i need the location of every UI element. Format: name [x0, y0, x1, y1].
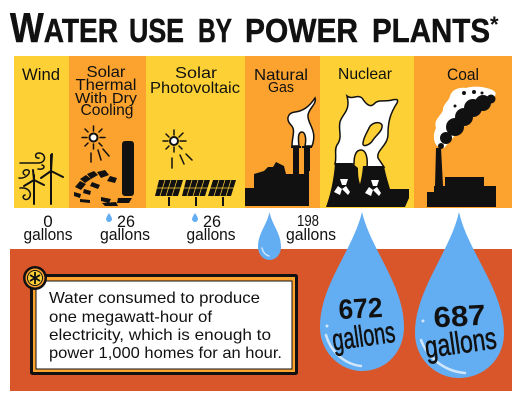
callout: definition — [23, 266, 296, 374]
callout text: electricity, which is enough to — [49, 327, 271, 344]
icon: sun — [82, 126, 109, 162]
label: solar photovoltaic — [150, 65, 240, 97]
values: 26 gallons photovoltaic: gallons — [186, 225, 236, 244]
title: PLANTS — [372, 12, 490, 49]
callout text: Water consumed to produce — [49, 290, 260, 307]
label: solar thermal with dry cooling: Solar — [86, 64, 126, 81]
title — [10, 4, 499, 51]
panel: coal — [414, 56, 512, 208]
label: natural gas — [254, 67, 308, 96]
drop: nuclear 672 gallons: 672 — [338, 292, 383, 325]
icon: solar panels — [155, 180, 236, 206]
icon: gas plant silhouette — [245, 146, 312, 206]
icon: smoke — [434, 87, 496, 149]
values: 0 gallons: gallons — [24, 225, 72, 244]
values: 198 gallons: 198 — [297, 213, 319, 230]
values: 198 gallons — [258, 212, 336, 260]
icon: gas plant steam — [288, 98, 315, 146]
values: 26 gallons thermal: gallons — [100, 225, 150, 244]
title: WATER — [10, 4, 118, 51]
panel: wind — [14, 56, 69, 208]
values: 0 gallons — [24, 212, 72, 244]
label: natural gas: Gas — [268, 79, 294, 96]
icon: steam hole — [363, 123, 382, 146]
values: 26 gallons thermal — [100, 212, 150, 244]
icon: solar tower and mirrors — [74, 141, 134, 206]
label: nuclear: Nuclear — [338, 66, 393, 83]
icon: wind turbines — [19, 153, 63, 204]
label: solar thermal with dry cooling — [75, 64, 138, 119]
drop: nuclear 672 gallons: gallons — [330, 316, 397, 357]
values: 26 gallons photovoltaic — [186, 212, 236, 244]
icon: nuclear steam — [335, 96, 398, 167]
label: solar thermal with dry cooling: Thermal — [76, 77, 136, 94]
icon: asterisk badge — [23, 266, 47, 290]
label: solar thermal with dry cooling: Cooling — [80, 102, 134, 119]
icon: small drop — [258, 212, 281, 260]
values: 198 gallons: gallons — [286, 225, 336, 244]
panel: solar photovoltaic — [146, 56, 245, 208]
icon: sun — [163, 130, 192, 168]
title: BY — [198, 12, 232, 49]
panel: nuclear — [320, 56, 414, 208]
title: USE — [129, 12, 184, 49]
icon: cooling towers — [326, 163, 409, 207]
values: 0 gallons: 0 — [43, 212, 53, 231]
values: 26 gallons thermal: 26 — [117, 212, 135, 231]
callout text — [49, 290, 282, 362]
callout text: one megawatt-hour of — [49, 309, 213, 326]
callout text: power 1,000 homes for an hour. — [49, 345, 282, 362]
label: wind: Wind — [22, 65, 60, 84]
icon: coal plant silhouette — [427, 148, 496, 207]
label: solar photovoltaic: Photovoltaic — [150, 80, 240, 97]
label: solar photovoltaic: Solar — [175, 65, 218, 82]
label: solar thermal with dry cooling: With Dry — [75, 90, 138, 107]
values: 26 gallons photovoltaic: 26 — [203, 212, 221, 231]
label: natural gas: Natural — [254, 67, 308, 84]
title: POWER — [245, 12, 358, 49]
drop: coal 687 gallons: 687 — [433, 300, 486, 334]
panel: natural gas — [245, 56, 320, 208]
label: coal: Coal — [447, 65, 479, 84]
icon: radiation symbols — [334, 179, 381, 196]
panel: red band — [10, 249, 512, 391]
drop: nuclear 672 gallons — [320, 212, 404, 371]
drop: coal 687 gallons — [415, 212, 504, 378]
panel: solar thermal — [69, 56, 146, 208]
title: * — [490, 12, 499, 37]
